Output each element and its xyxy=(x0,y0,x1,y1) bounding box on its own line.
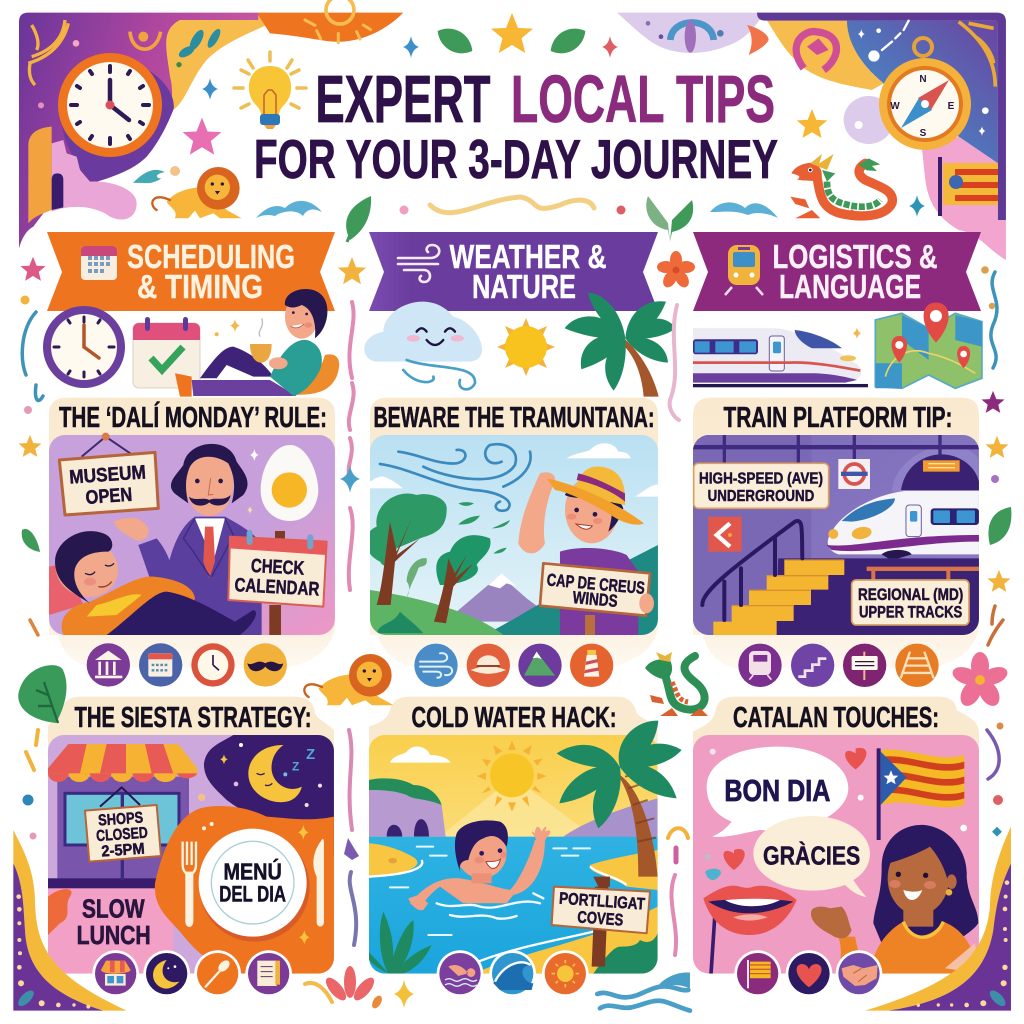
icon: compass: E xyxy=(948,101,955,112)
title: FOR YOUR 3-DAY JOURNEY xyxy=(254,128,778,190)
heading: siesta strategy: THE SIESTA STRATEGY: xyxy=(74,702,312,734)
sign: Cap de Creus winds xyxy=(540,563,654,635)
sign: regional MD upper tracks xyxy=(852,580,969,625)
icon: orange flower xyxy=(657,251,695,290)
icon: lion top xyxy=(152,167,242,218)
panel: cold water hack xyxy=(362,697,682,997)
icon: light bulb xyxy=(234,52,306,129)
sign: museum open xyxy=(59,433,158,515)
sign: regional MD upper tracks: REGIONAL (MD) xyxy=(858,585,963,604)
speech bubble: bon dia: BON DIA xyxy=(724,774,830,808)
title xyxy=(254,62,778,190)
banner: weather and nature xyxy=(369,232,658,311)
sign: shops closed xyxy=(85,787,161,862)
corner decoration: top left xyxy=(19,0,403,248)
icon row: wind, hat, mountain, lighthouse xyxy=(414,644,613,687)
icon: lion middle xyxy=(304,654,394,705)
icon row: swimmer, wave, sun xyxy=(437,950,589,997)
text: slow lunch: LUNCH xyxy=(77,920,151,950)
sign: high-speed AVE underground: UNDERGROUND xyxy=(708,488,814,505)
illustration: high-speed train xyxy=(693,327,868,387)
scene: Z xyxy=(292,760,299,774)
banner: logistics and language: LANGUAGE xyxy=(779,268,921,305)
scene xyxy=(362,735,658,974)
speech bubble: gracies xyxy=(753,816,870,897)
title: EXPERT xyxy=(316,62,491,137)
sign: Portlligat coves xyxy=(552,877,650,967)
panel: Dali Monday rule xyxy=(40,398,335,687)
corner decoration: top right xyxy=(617,13,1006,260)
sign: high-speed AVE underground: HIGH-SPEED (AVE) xyxy=(699,470,823,487)
heading: Catalan touches: CATALAN TOUCHES: xyxy=(733,702,939,734)
scattered decorations xyxy=(18,257,1011,1008)
speech bubble: gracies: GRÀCIES xyxy=(763,841,860,871)
corner decoration: bottom right xyxy=(865,827,1011,1011)
sign: regional MD upper tracks: UPPER TRACKS xyxy=(859,603,962,622)
decorations around the title xyxy=(133,13,925,242)
icon: calendar with check xyxy=(133,317,200,388)
icon: clock top left xyxy=(58,53,162,157)
scene: Z xyxy=(306,747,315,763)
sign: check calendar xyxy=(228,530,327,635)
sign: museum open: MUSEUM xyxy=(69,462,147,489)
icon row: museum, calendar, clock, moustache xyxy=(87,643,287,687)
icon: palm tree xyxy=(557,721,682,877)
sign: Cap de Creus winds: WINDS xyxy=(572,587,618,611)
icon: leaf left xyxy=(18,665,67,723)
speech bubble: bon dia xyxy=(707,747,848,837)
text: slow lunch: SLOW xyxy=(82,893,145,923)
icon: compass: N xyxy=(919,74,927,85)
icon: small clock xyxy=(43,306,125,388)
banner: logistics and language xyxy=(693,232,981,311)
icon row: shop, moon, spoon, menu xyxy=(92,950,292,997)
panel: train platform tip xyxy=(693,398,979,687)
icon: coral plant bottom xyxy=(305,966,384,1010)
icon: calendar xyxy=(81,246,117,280)
text: menu del dia xyxy=(219,857,286,906)
sign: check calendar: CHECK xyxy=(250,556,305,580)
sign: museum open: OPEN xyxy=(85,485,133,509)
icon: dragon top xyxy=(790,154,892,218)
banner: scheduling and timing: & TIMING xyxy=(137,268,263,305)
scene xyxy=(40,435,335,635)
corner decoration: bottom left xyxy=(13,830,127,1011)
banner: scheduling and timing: SCHEDULING xyxy=(127,238,295,275)
illustration: map with pins xyxy=(875,303,982,388)
scene xyxy=(693,435,979,635)
heading: cold water hack: COLD WATER HACK: xyxy=(412,702,616,734)
icon: dragon middle xyxy=(645,652,708,716)
icon: palm tree top xyxy=(565,293,676,397)
icon: compass: W xyxy=(890,101,900,112)
title: LOCAL TIPS xyxy=(511,62,775,137)
sign: Portlligat coves: COVES xyxy=(577,907,624,930)
icon: flower right xyxy=(950,652,1010,710)
icon row: flag, heart, handshake xyxy=(734,950,882,997)
illustration: man relaxing with coffee xyxy=(175,289,339,397)
icon: compass: S xyxy=(920,128,927,139)
text: slow lunch xyxy=(77,893,151,950)
icon: waves bottom xyxy=(597,973,690,1011)
sign: Portlligat coves: PORTLLIGAT xyxy=(558,889,646,914)
panel: Catalan touches xyxy=(693,697,980,997)
sign: Cap de Creus winds: CAP DE CREUS xyxy=(546,569,646,598)
panel: Tramuntana xyxy=(360,398,658,687)
heading: Dali Monday rule: THE ‘DALÍ MONDAY’ RULE: xyxy=(59,400,327,434)
heading: Tramuntana: BEWARE THE TRAMUNTANA: xyxy=(374,402,654,434)
icon: sun xyxy=(497,318,555,376)
text: menu del dia: DEL DIA xyxy=(219,881,286,906)
icon: train front xyxy=(725,245,763,295)
banner: logistics and language: LOGISTICS & xyxy=(772,238,938,275)
scene xyxy=(360,435,658,635)
sign: shops closed: SHOPS xyxy=(98,809,144,830)
sign: check calendar: CALENDAR xyxy=(234,575,320,601)
text: menu del dia: MENÚ xyxy=(223,857,282,884)
sign: shops closed: 2-5PM xyxy=(101,841,145,860)
banner: scheduling and timing xyxy=(47,232,335,311)
banner: weather and nature: WEATHER & xyxy=(450,238,606,275)
sign: shops closed: CLOSED xyxy=(96,825,148,845)
scene xyxy=(48,735,334,974)
icon: Catalan flag top right xyxy=(938,157,998,216)
panel: siesta strategy xyxy=(48,697,334,997)
illustration: smiling cloud xyxy=(364,302,482,389)
scene xyxy=(693,735,980,974)
banner: weather and nature: NATURE xyxy=(472,268,576,305)
icon: compass xyxy=(879,38,971,150)
sign: high-speed AVE underground xyxy=(694,463,829,508)
icon: wind xyxy=(398,245,439,282)
icon row: train, stairs, sign, tracks xyxy=(738,644,939,687)
